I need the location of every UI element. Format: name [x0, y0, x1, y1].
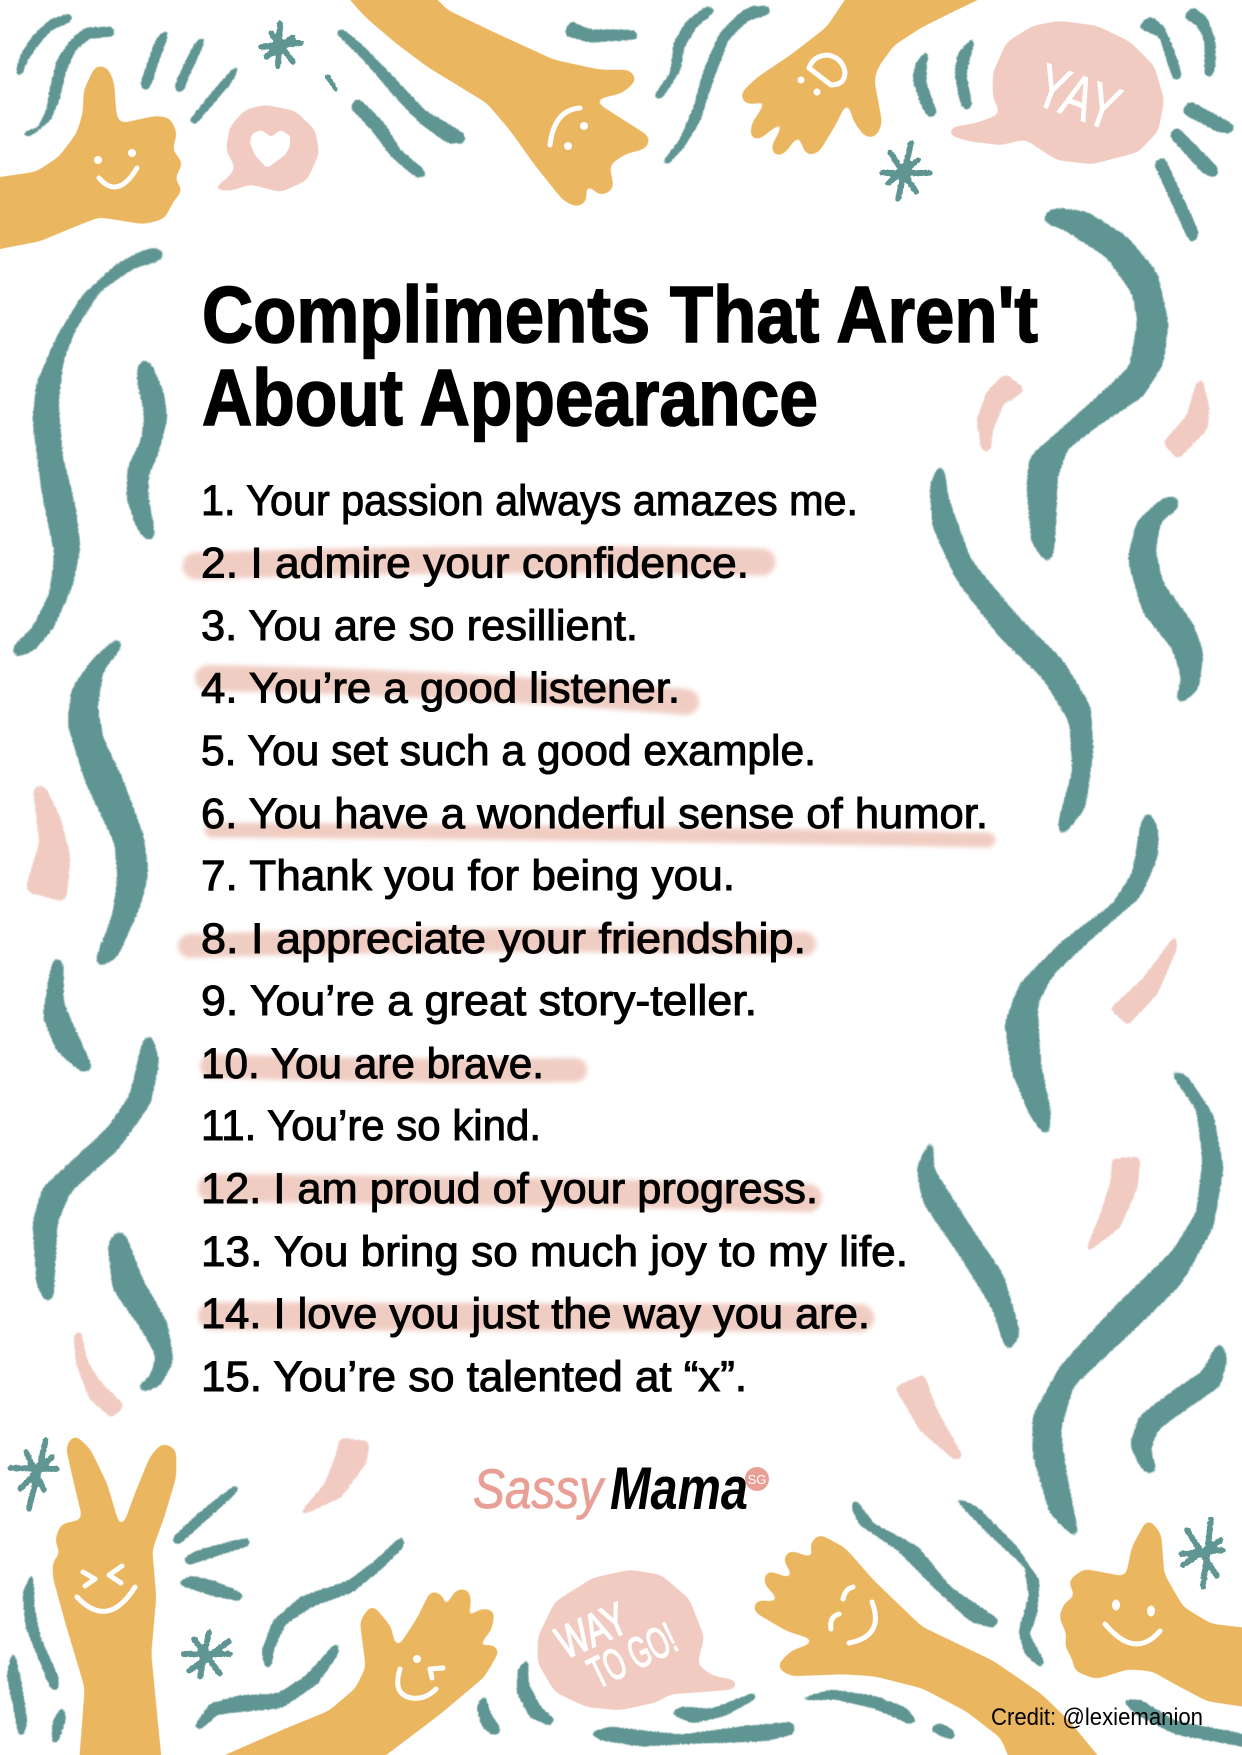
stroke: bottom right 2: [952, 1496, 1044, 1668]
icon: star bottom left inner: [183, 1632, 230, 1677]
highlight: item 8: [190, 940, 804, 946]
title: About Appearance: [202, 353, 818, 442]
stroke: pink right 2: [1163, 376, 1209, 459]
stroke: top wave short: [655, 6, 716, 100]
item 2: 2. I admire your confidence.: [201, 540, 749, 588]
stroke: left small: [43, 953, 94, 1072]
stroke: left side middle: [68, 635, 148, 968]
item 9: 9. You’re a great story-teller.: [201, 977, 757, 1025]
stroke: peace burst 2: [183, 1538, 250, 1565]
stroke: right edge lower squiggle: [1130, 1338, 1227, 1476]
item 3: 3. You are so resillient.: [201, 602, 638, 650]
highlight strokes: [190, 560, 988, 1318]
item 1: 1. Your passion always amazes me.: [201, 477, 858, 525]
stroke: top centre long: [336, 28, 466, 143]
stroke: pink bottom: [297, 1438, 369, 1517]
item 10: 10. You are brave.: [201, 1040, 544, 1088]
stroke: bottom right 1: [852, 1498, 999, 1628]
stroke: top centre dash: [324, 74, 338, 92]
stroke: bottom left edge 1: [23, 1568, 58, 1691]
stroke: bottom left edge 3: [52, 1704, 65, 1744]
stroke: top left squiggle: [23, 27, 114, 138]
stroke: left of bubble 2: [477, 1693, 501, 1736]
icon: heart: [250, 130, 290, 168]
stroke: pink left 1: [25, 785, 70, 902]
item 14: 14. I love you just the way you are.: [201, 1290, 870, 1338]
stroke: bottom centre arc: [791, 1690, 917, 1724]
highlight: item 6: [212, 830, 988, 840]
stroke: pink left 2: [74, 1329, 124, 1418]
stroke: peace burst 1: [171, 1483, 239, 1545]
item 4: 4. You’re a good listener.: [201, 664, 680, 712]
bubble: way to go: [538, 1570, 738, 1710]
bubble: YAY: YAY: [1027, 51, 1129, 145]
stroke: pink right 4: [1085, 1157, 1140, 1254]
highlight: item 2: [196, 560, 762, 566]
hand: top centre reaching down: [340, 0, 650, 207]
stroke: bottom left edge 2: [7, 1647, 27, 1737]
stroke: under bubble long: [590, 1722, 794, 1746]
icon: star bottom left: [10, 1440, 57, 1509]
stroke: right of yay bubble 1: [1138, 16, 1182, 81]
hand: thumbs up top left: [0, 65, 183, 251]
item 7: 7. Thank you for being you.: [201, 852, 735, 900]
bubble: heart: [207, 105, 319, 192]
stroke: wave above waving hand: [262, 1535, 404, 1668]
item 6: 6. You have a wonderful sense of humor.: [201, 790, 988, 838]
title: Compliments That Aren't: [202, 270, 1038, 359]
title: [202, 270, 1038, 442]
stroke: pink right 5: [895, 1375, 963, 1460]
stroke: right of yay bubble 3: [1182, 101, 1234, 133]
hand: bottom right reaching: [753, 1534, 1107, 1755]
stroke: right lower long wave: [1033, 1064, 1223, 1543]
stroke: pink right 1: [977, 374, 1024, 451]
stroke: top centre lower: [350, 98, 426, 177]
highlight: item 4: [208, 678, 686, 702]
stroke: thumb burst 1: [140, 27, 168, 91]
bubble: YAY: [949, 21, 1164, 164]
hand: thumbs up bottom right: [1059, 1518, 1242, 1708]
item 5: 5. You set such a good example.: [201, 727, 816, 775]
stroke: wave left of waving hand: [194, 1641, 338, 1730]
item 13: 13. You bring so much joy to my life.: [201, 1228, 908, 1276]
stroke: right top large: [1027, 208, 1168, 567]
stroke: bottom centre dash: [929, 1723, 954, 1740]
stroke: bottom right streak: [1122, 1700, 1242, 1748]
highlight: item 14: [212, 1316, 860, 1318]
stroke: left side short: [127, 358, 167, 544]
stroke: right of yay bubble 2: [1183, 7, 1215, 78]
item 11: 11. You’re so kind.: [201, 1102, 541, 1150]
item 12: 12. I am proud of your progress.: [201, 1165, 818, 1213]
stroke: right lower inner: [917, 1130, 1020, 1355]
stroke: thumb burst 2: [175, 35, 206, 93]
stroke: left of bubble 1: [517, 1657, 555, 1726]
bubble: way to go: WAY: [548, 1592, 635, 1669]
logo: Sassy Mama SG: Mama: [610, 1455, 748, 1522]
stroke: left of yay bubble 1: [913, 48, 937, 118]
stroke: right middle wave: [1005, 807, 1158, 1141]
icon: star bottom right: [1181, 1519, 1223, 1587]
stroke: left lower wave: [33, 1029, 159, 1306]
logo: Sassy Mama SG: Sassy: [473, 1457, 606, 1520]
highlight: item 10: [212, 1066, 575, 1070]
stroke: right of yay bubble 5: [1154, 157, 1199, 243]
stroke: pink right 3: [1110, 933, 1177, 1025]
stroke: under bubble short: [671, 1692, 756, 1723]
bubble: way to go: TO GO!: [581, 1614, 685, 1698]
credit: Credit: @lexiemanion: [991, 1704, 1203, 1731]
hand: waving bottom: [198, 1589, 500, 1755]
hand: peace sign bottom left: [53, 1434, 176, 1755]
item 8: 8. I appreciate your friendship.: [201, 915, 806, 963]
compliments list: [201, 477, 988, 1401]
icon: star top right: [882, 143, 930, 199]
large brush strokes: [12, 208, 1227, 1543]
stroke: left side long: [12, 249, 165, 658]
stroke: right of yay bubble 4: [1169, 127, 1218, 178]
stroke: top wave long: [662, 6, 770, 165]
stroke: right edge squiggle: [1128, 496, 1203, 708]
stroke: top left arc: [16, 13, 72, 78]
stroke: left lower hook: [108, 1228, 173, 1392]
item 15: 15. You’re so talented at “x”.: [201, 1353, 747, 1401]
stroke: right long wave: [930, 457, 1093, 841]
stroke: above fingers: [564, 21, 637, 42]
highlight: item 12: [212, 1188, 808, 1198]
logo: Sassy Mama SG: [473, 1455, 769, 1522]
stroke: left of yay bubble 2: [955, 35, 976, 110]
stroke: peace burst 3: [177, 1576, 243, 1601]
hand: top right with D face: [741, 0, 1002, 157]
stroke: thumb burst 3: [189, 61, 242, 125]
icon: star top left: [261, 23, 301, 66]
logo: Sassy Mama SG: SG: [748, 1472, 766, 1487]
